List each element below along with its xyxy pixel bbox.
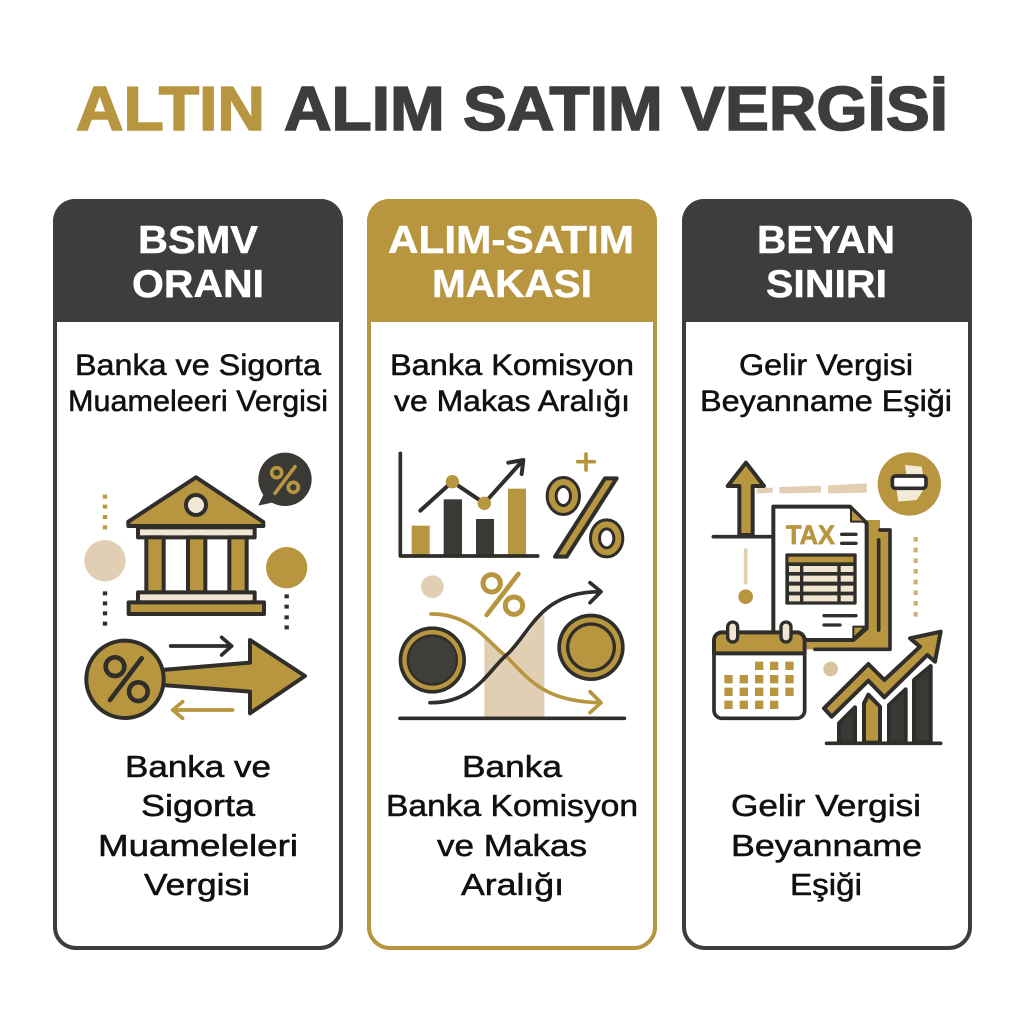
panel header: alım-satım makası: MAKASI <box>432 263 592 306</box>
subtitle: makas <box>390 349 634 418</box>
icon: gold badge <box>878 452 941 516</box>
body text: beyan: Eşiği <box>790 867 862 902</box>
icon: bank building <box>128 477 264 614</box>
body text: BSMV <box>98 749 298 902</box>
subtitle: BSMV: Muameleeri Vergisi <box>68 385 328 418</box>
panel header: beyan sınırı: SINIRI <box>766 263 887 306</box>
panel header: alım-satım makası <box>367 199 657 322</box>
icon: small percent <box>483 574 523 615</box>
body text: beyan <box>731 788 922 902</box>
icon: gold coin <box>557 614 625 681</box>
icon: dark coin <box>399 626 466 694</box>
panel header: BSMV oranı <box>53 199 343 322</box>
icon: tax document <box>773 507 890 649</box>
body text: makas: Aralığı <box>461 867 564 902</box>
subtitle: makas: Banka Komisyon <box>390 349 634 382</box>
panel header: beyan sınırı: BEYAN <box>757 219 895 262</box>
icon: up arrow <box>713 463 773 537</box>
body text: BSMV: Banka ve <box>125 749 271 784</box>
panel header: BSMV oranı: BSMV <box>138 219 258 262</box>
icon: percent arrow <box>86 640 305 718</box>
body text: makas: Banka Komisyon <box>386 788 638 823</box>
title: ALIM SATIM VERGİSİ <box>284 75 948 144</box>
body text: beyan: Beyanname <box>731 828 922 863</box>
subtitle: beyan: Gelir Vergisi <box>739 349 913 382</box>
icon: percent speech bubble <box>258 453 312 506</box>
icon: tax form, calendar and rising chart <box>713 452 941 743</box>
subtitle: beyan: Beyanname Eşiği <box>700 385 952 418</box>
icon: chart, percent and crossing curves <box>399 453 625 718</box>
body text: makas: Banka <box>462 749 563 784</box>
panel header: BSMV oranı: ORANI <box>132 263 264 306</box>
body text: makas <box>386 749 638 902</box>
icon: tax document: TAX <box>786 520 835 550</box>
panel: alım-satım makası <box>367 199 657 948</box>
body text: BSMV: Sigorta <box>141 788 256 823</box>
body text: BSMV: Muameleleri <box>98 828 298 863</box>
panel header: alım-satım makası: ALIM-SATIM <box>388 219 634 262</box>
panel header: beyan sınırı <box>682 199 972 322</box>
icon: calendar <box>714 622 805 718</box>
subtitle: BSMV: Banka ve Sigorta <box>75 349 321 382</box>
body text: makas: ve Makas <box>437 828 587 863</box>
icon: large percent <box>552 478 618 557</box>
icon: rising bars and arrow <box>824 632 941 743</box>
subtitle: beyan <box>700 349 952 418</box>
subtitle: BSMV <box>68 349 328 418</box>
body text: beyan: Gelir Vergisi <box>731 788 921 823</box>
body text: BSMV: Vergisi <box>144 867 250 902</box>
icon: bank with percent arrow <box>84 453 312 718</box>
subtitle: makas: ve Makas Aralığı <box>394 385 630 418</box>
icon: bar chart <box>400 453 538 556</box>
panel: BSMV oranı <box>53 199 343 948</box>
title: ALTIN <box>76 75 265 144</box>
panel: beyan sınırı <box>682 199 972 948</box>
